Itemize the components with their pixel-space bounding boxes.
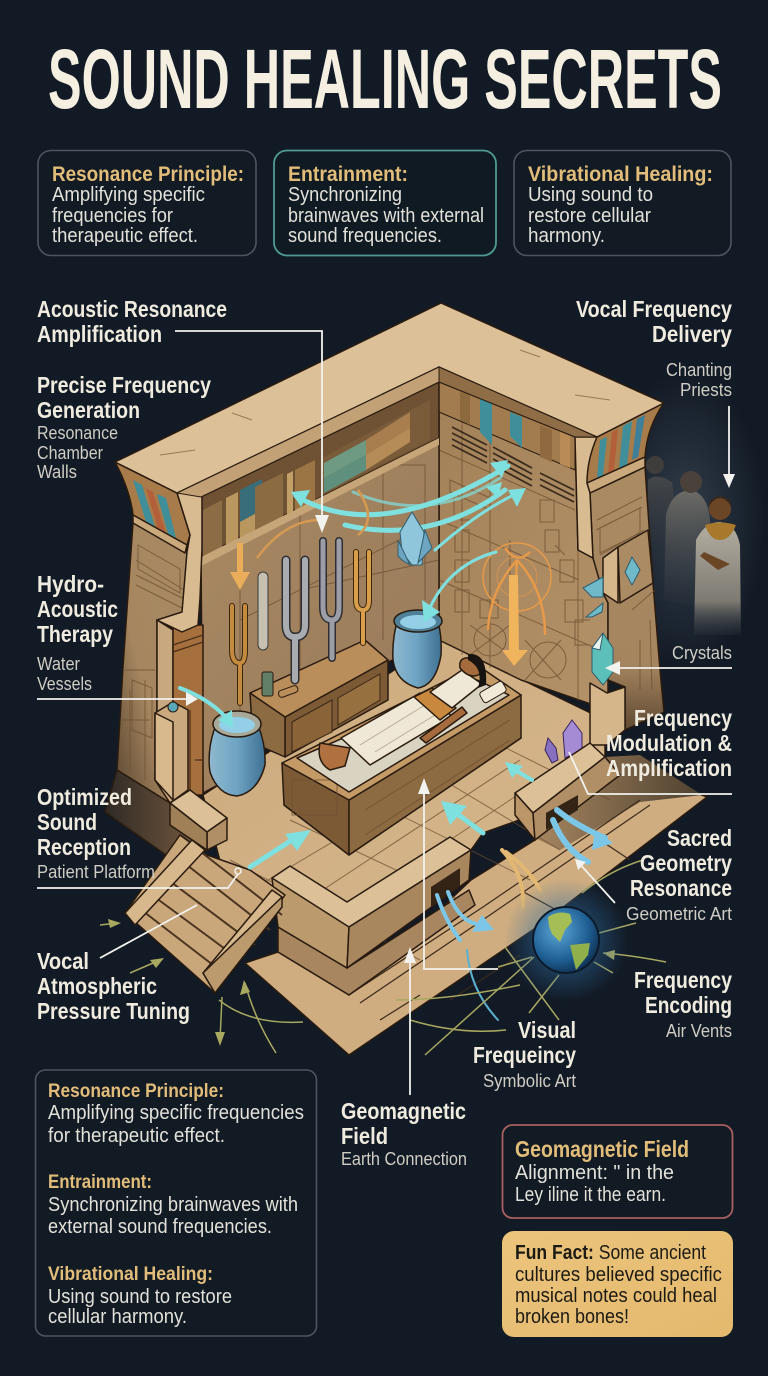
base block near pillar [170,790,227,850]
crystals on the right [583,557,640,685]
label: acoustic resonance amplification [37,296,227,347]
label: sacred geometry resonance: Geometric Art [626,904,732,924]
label: vocal atmospheric pressure tuning [37,948,190,1024]
water vessel front [180,688,265,796]
label: geomagnetic field: Field [341,1123,388,1149]
panel: geomagnetic field callout: Geomagnetic Field [515,1136,689,1162]
panel: geomagnetic field callout: Ley iline it the earn. [515,1184,666,1206]
right block with vent [515,743,620,840]
right lip of slab [575,437,597,558]
label: frequency modulation and amplification: Amplification [606,755,732,781]
floating crystal [398,512,432,565]
label: visual frequency [473,1017,576,1091]
label: crystals: Crystals [672,643,732,663]
callout arrow: crystals [605,661,732,675]
label: sacred geometry resonance: Resonance [630,875,732,901]
label: vocal atmospheric pressure tuning: Vocal [37,948,89,974]
air vent streams [437,810,613,1020]
panel: bottom concepts [36,1070,316,1336]
label: vocal frequency delivery: Delivery [652,321,732,347]
slab top [115,303,664,493]
panel: bottom concepts: Entrainment: [48,1172,152,1193]
callout line: frequency modulation [569,752,732,794]
water vessel back [393,610,442,688]
floor [203,640,605,927]
panel: resonance principle card: frequencies for [52,205,173,227]
orange arc [257,490,368,558]
teal arrow into back vessel [428,552,496,612]
purple crystals [545,720,582,763]
raised front block [272,837,475,995]
panel: bottom concepts: Using sound to restore [48,1286,232,1308]
label: visual frequency: Visual [518,1017,576,1043]
right cap frieze [587,403,664,493]
panel: entrainment card: Entrainment: [288,163,408,186]
tuning forks [232,541,369,703]
callout arrow: geomagnetic field [404,947,416,1095]
panel: vibrational healing card: restore cellular [528,205,651,227]
vent slats [452,427,574,502]
panel: entrainment card: Synchronizing [288,184,402,206]
label: optimized sound reception: Patient Platform [37,862,155,882]
label: precise frequency generation: Walls [37,462,77,482]
panel: entrainment card [274,150,496,256]
callout arrow: visual frequency [418,778,498,969]
panel: geomagnetic field callout: Alignment: " in the [515,1162,674,1184]
label: frequency encoding: Encoding [645,992,732,1018]
label: frequency encoding: Frequency [634,967,732,993]
label: hydro-acoustic therapy: Vessels [37,674,92,694]
sonic arcs [291,460,526,550]
label: geomagnetic field: Earth Connection [341,1149,467,1169]
callout line: patient platform [37,868,241,888]
callout line: vocal tuning [100,905,197,958]
panel: vibrational healing card: Vibrational Healing: [528,163,713,186]
label: hydro-acoustic therapy: Therapy [37,621,113,647]
earth energy lines [100,860,666,1055]
label: precise frequency generation: Precise Frequency [37,372,211,398]
label: vocal frequency delivery: Chanting [666,360,732,380]
panel: bottom concepts: Synchronizing brainwaves with [48,1194,298,1216]
label: optimized sound reception [37,784,155,882]
panel: resonance principle card: therapeutic effect. [52,225,198,247]
shelf [201,382,439,566]
label: acoustic resonance amplification: Acoustic Resonance [37,296,227,322]
right frieze [439,382,575,470]
panel: fun fact: broken bones! [515,1306,629,1328]
panel: fun fact: musical notes could heal [515,1285,717,1307]
panel: fun fact [502,1231,733,1337]
panel: vibrational healing card: Using sound to [528,184,653,206]
dark step band [535,755,702,850]
label: hydro-acoustic therapy: Water [37,654,80,674]
label: frequency modulation and amplification [606,705,732,781]
globe [504,878,628,1002]
lower terrace [245,757,707,1055]
right pillar [590,467,664,730]
panel: resonance principle card [38,150,256,256]
orange sacred symbol [483,543,551,666]
sarcophagus platform [282,665,521,855]
label: hydro-acoustic therapy: Hydro- [37,571,104,597]
label: visual frequency: Symbolic Art [483,1071,576,1091]
panel: bottom concepts: external sound frequencies. [48,1216,272,1238]
label: sacred geometry resonance [626,825,732,924]
illustration: resonance chamber [37,303,765,1095]
label: frequency modulation and amplification: Modulation & [606,730,732,756]
left lip of slab [157,492,202,632]
label: precise frequency generation: Chamber [37,443,103,463]
label: vocal atmospheric pressure tuning: Pressure Tuning [37,998,190,1024]
label: vocal atmospheric pressure tuning: Atmospheric [37,973,157,999]
panel: bottom concepts: Amplifying specific frequencies [48,1102,304,1124]
label: optimized sound reception: Sound [37,809,97,835]
label: visual frequency: Frequeincy [473,1042,576,1068]
orange down arrow [230,543,250,590]
panel: bottom concepts: Resonance Principle: [48,1081,224,1102]
label: precise frequency generation: Generation [37,397,140,423]
panel: resonance principle card: Resonance Principle: [52,163,244,186]
label: precise frequency generation [37,372,211,482]
left cap frieze [115,462,190,553]
callout arrow: chanting priests [723,406,735,488]
left wall [201,438,439,793]
label: precise frequency generation: Resonance [37,423,118,443]
label: hydro-acoustic therapy [37,571,118,694]
label: frequency encoding [634,967,732,1041]
label: geomagnetic field [341,1098,467,1169]
callout line: sacred geometry [575,859,615,903]
label: frequency modulation and amplification: Frequency [634,705,732,731]
label: vocal frequency delivery: Vocal Frequency [576,296,732,322]
label: vocal frequency delivery [576,296,732,400]
staircase [125,835,285,993]
pedestal with sphere [155,702,188,803]
label: hydro-acoustic therapy: Acoustic [37,596,118,622]
panel: entrainment card: sound frequencies. [288,225,442,247]
label: sacred geometry resonance: Geometry [640,850,732,876]
wooden bench [250,640,388,757]
panel: bottom concepts: for therapeutic effect. [48,1125,225,1147]
label: vocal frequency delivery: Priests [680,380,732,400]
chanting priests [605,370,765,670]
label: optimized sound reception: Reception [37,834,131,860]
panel: bottom concepts: cellular harmony. [48,1306,187,1328]
panel: bottom concepts: Vibrational Healing: [48,1264,213,1285]
label: acoustic resonance amplification: Amplification [37,321,162,347]
panel: fun fact: Fun Fact: Some ancient [515,1242,706,1264]
right wall [439,382,608,710]
teal flow arrows [250,762,532,867]
callout arrow: water vessels [37,692,198,706]
panel: resonance principle card: Amplifying specific [52,184,205,206]
panel: vibrational healing card [514,150,731,256]
left pillar [105,523,207,860]
panel: vibrational healing card: harmony. [528,225,605,247]
label: optimized sound reception: Optimized [37,784,132,810]
crystal pedestal [590,683,625,745]
label: frequency encoding: Air Vents [666,1021,732,1041]
panel: fun fact: cultures believed specific [515,1264,722,1286]
label: geomagnetic field: Geomagnetic [341,1098,466,1124]
callout arrow: acoustic resonance [175,331,329,533]
panel: entrainment card: brainwaves with external [288,205,484,227]
patient [319,654,507,770]
panel: geomagnetic field callout [502,1125,732,1218]
label: sacred geometry resonance: Sacred [667,825,732,851]
